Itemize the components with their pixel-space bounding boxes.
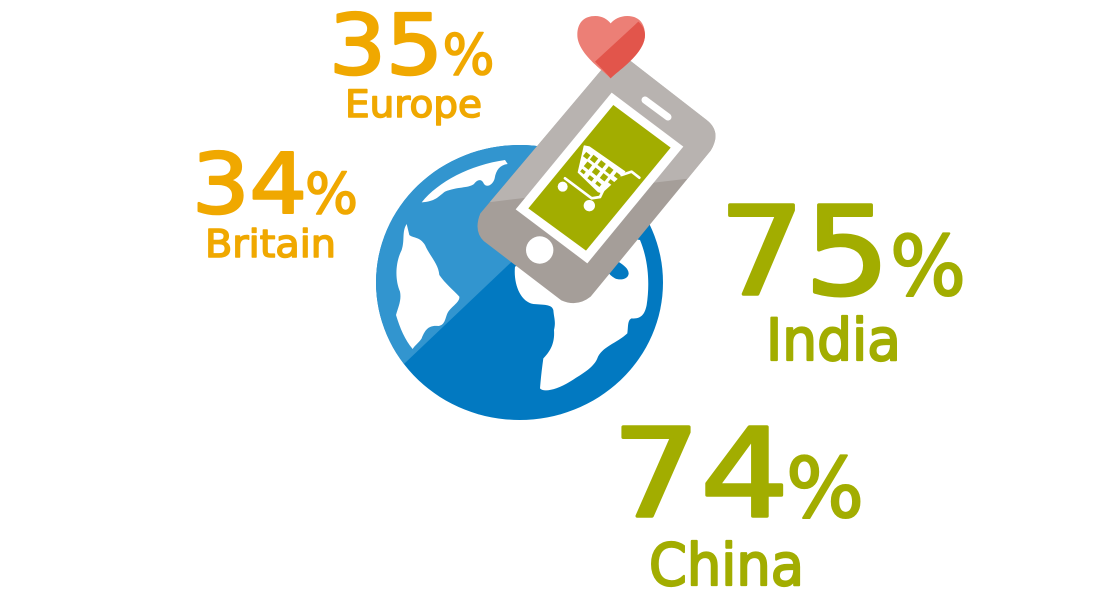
stat: Britain 34%: 34 <box>192 136 307 233</box>
continent: left landmass <box>396 224 459 349</box>
continent: arctic <box>422 160 508 202</box>
icon: heart <box>577 16 645 78</box>
stat: China 74%: 74 <box>612 403 789 545</box>
icon: shopping cart <box>558 146 639 211</box>
inlet: blue sea shape <box>607 262 629 279</box>
stat: China 74%: % <box>786 440 864 537</box>
stat: India 75% <box>719 181 966 374</box>
stat: Britain 34%: % <box>305 162 358 227</box>
stat: India 75%: India <box>766 306 901 374</box>
phone screen <box>516 93 683 263</box>
stat: Europe 35% <box>329 0 494 126</box>
speaker <box>645 100 668 117</box>
stat: Britain 34%: Britain <box>205 222 336 266</box>
icon: smartphone <box>478 57 715 303</box>
stat: Europe 35%: Europe <box>345 83 482 126</box>
home button <box>526 236 553 264</box>
icon: globe <box>376 145 663 420</box>
infographic canvas <box>198 10 962 588</box>
stat: Europe 35%: % <box>442 23 494 88</box>
stat: India 75%: % <box>890 218 966 315</box>
continent: right landmass <box>515 233 648 390</box>
stat: China 74% <box>612 403 864 599</box>
stat: Britain 34% <box>192 136 358 266</box>
stat: India 75%: 75 <box>719 181 890 323</box>
stat: China 74%: China <box>649 531 804 599</box>
